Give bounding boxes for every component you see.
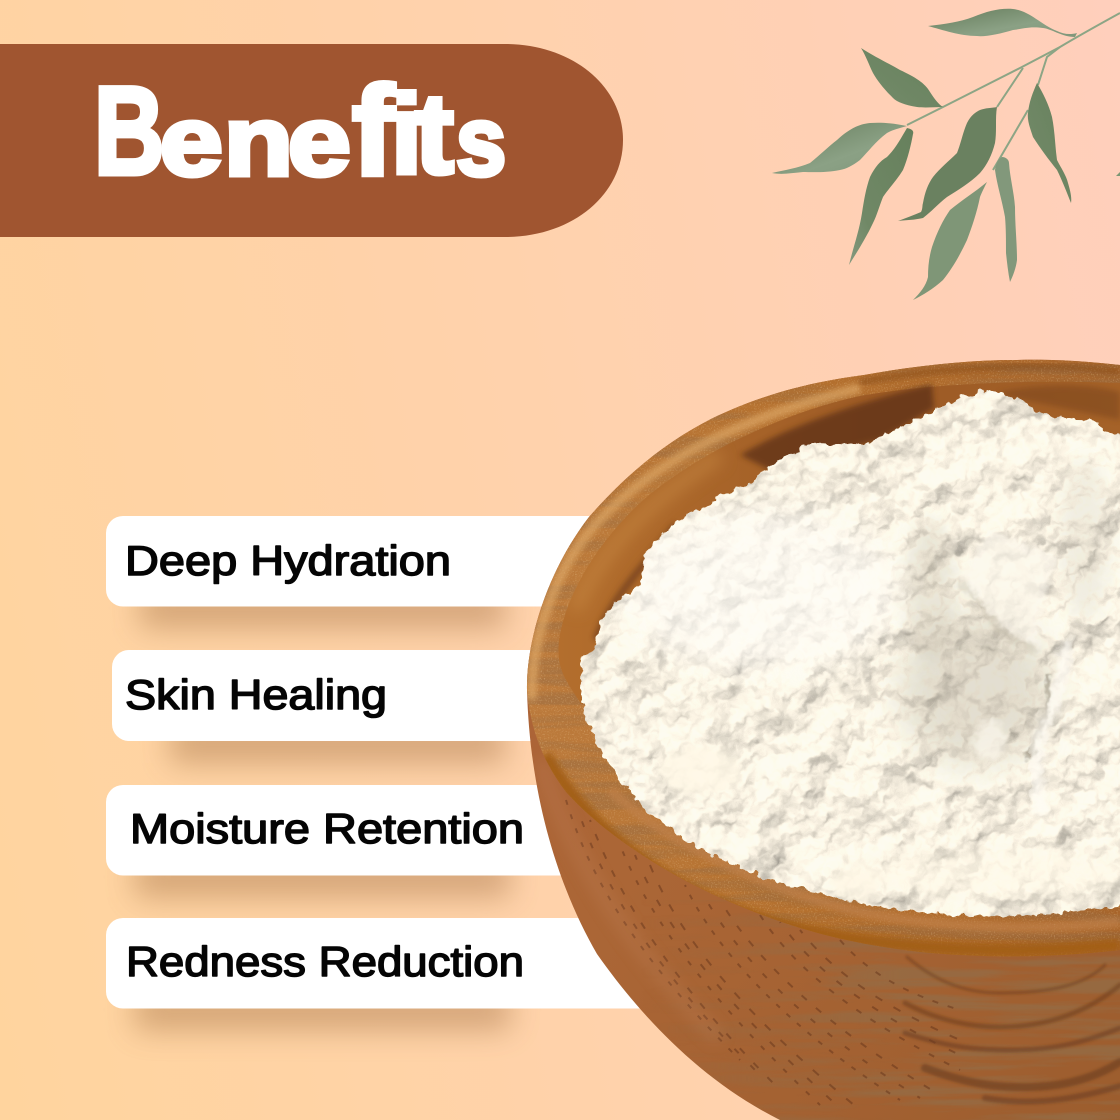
powder shading <box>900 615 1050 765</box>
leaf <box>898 107 997 221</box>
list card: Skin Healing <box>112 650 672 763</box>
bowl body <box>500 340 1120 1120</box>
leaf <box>995 157 1017 282</box>
powder clump <box>976 533 1057 642</box>
label: Redness Reduction <box>126 938 524 985</box>
label: Moisture Retention <box>130 805 524 852</box>
title: Benefits <box>94 60 506 202</box>
bowl inner wall <box>558 382 1120 704</box>
title: Benefits: i <box>391 72 422 197</box>
leaf <box>928 9 1077 37</box>
bowl rim <box>526 360 1120 956</box>
list card: Moisture Retention <box>106 785 666 897</box>
header banner <box>0 44 623 237</box>
leaf tip at edge <box>1116 172 1120 176</box>
title: Benefits: e <box>160 86 223 196</box>
leaf <box>772 123 907 174</box>
title: Benefits: s <box>456 86 506 196</box>
wood grain arcs <box>905 957 1120 1102</box>
title: Benefits: n <box>224 86 293 196</box>
label: Deep Hydration <box>125 537 451 584</box>
leaf <box>849 128 913 265</box>
flour powder mound <box>560 370 1120 930</box>
title: Benefits: f <box>352 60 394 202</box>
title: Benefits: e <box>288 86 351 196</box>
list card: Deep Hydration <box>106 516 666 628</box>
wooden bowl of powder <box>500 340 1120 1120</box>
title: Benefits: B <box>94 62 164 201</box>
eucalyptus branch <box>772 9 1120 300</box>
leaf <box>861 48 943 107</box>
powder crease <box>1027 673 1048 760</box>
label: Skin Healing <box>125 671 387 718</box>
wood pores <box>566 800 960 1110</box>
branch stems <box>907 13 1120 170</box>
title: Benefits: t <box>415 71 454 198</box>
leaf <box>913 182 987 300</box>
leaf <box>1028 83 1071 203</box>
list card: Redness Reduction <box>106 918 686 1030</box>
